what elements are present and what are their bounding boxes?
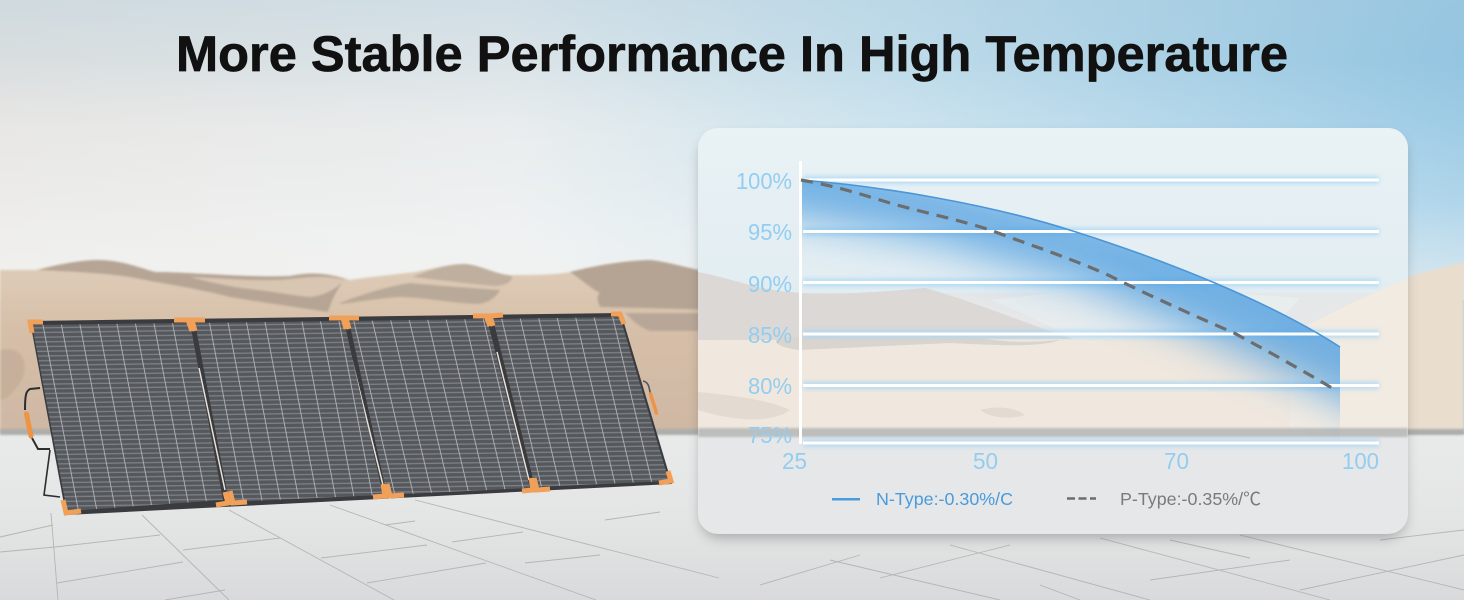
gridlines and y axis (800, 161, 1379, 444)
N-type curve (801, 180, 1340, 347)
gridline glow (803, 180, 1379, 443)
x-axis labels: 50 (973, 448, 998, 474)
y-axis labels: 100% (736, 168, 792, 194)
left handle strap and kickstand (25, 388, 60, 497)
background: desert dunes (0, 260, 1464, 432)
y-axis labels: 95% (748, 219, 792, 245)
legend (832, 489, 1261, 509)
right handle (643, 381, 656, 414)
y-axis labels: 90% (748, 271, 792, 297)
solar section 1 (32, 323, 223, 511)
P-type dashed curve (801, 180, 1332, 388)
legend: N-type: N-Type:-0.30%/C (876, 489, 1013, 509)
hinge gaps (199, 352, 529, 490)
card backdrop (698, 128, 1408, 534)
x-axis labels (782, 448, 1379, 474)
y-axis labels: 75% (748, 422, 792, 448)
solar section 3 (349, 319, 530, 495)
N-type gradient area (802, 182, 1340, 430)
title: More Stable Performance In High Temperature (176, 25, 1288, 82)
x-axis labels: 25 (782, 448, 807, 474)
solar section 2 (195, 321, 383, 502)
solar section 4 (493, 317, 669, 487)
background: paved floor (0, 429, 1464, 600)
orange corner protectors (30, 314, 671, 513)
solar panel product (25, 313, 672, 515)
background: sky (0, 0, 1464, 440)
icon: left handle grip (26, 414, 31, 436)
y-axis labels: 80% (748, 373, 792, 399)
y-axis labels: 85% (748, 322, 792, 348)
panel shadow (700, 136, 1406, 538)
x-axis labels: 70 (1164, 448, 1189, 474)
x-axis labels: 100 (1342, 448, 1379, 474)
y-axis labels (736, 168, 792, 448)
legend: P-type: P-Type:-0.35%/℃ (1120, 489, 1261, 509)
panel: temperature chart card (698, 128, 1420, 534)
area chart: efficiency vs temperature (738, 161, 1381, 469)
panel backing frame (30, 313, 672, 515)
